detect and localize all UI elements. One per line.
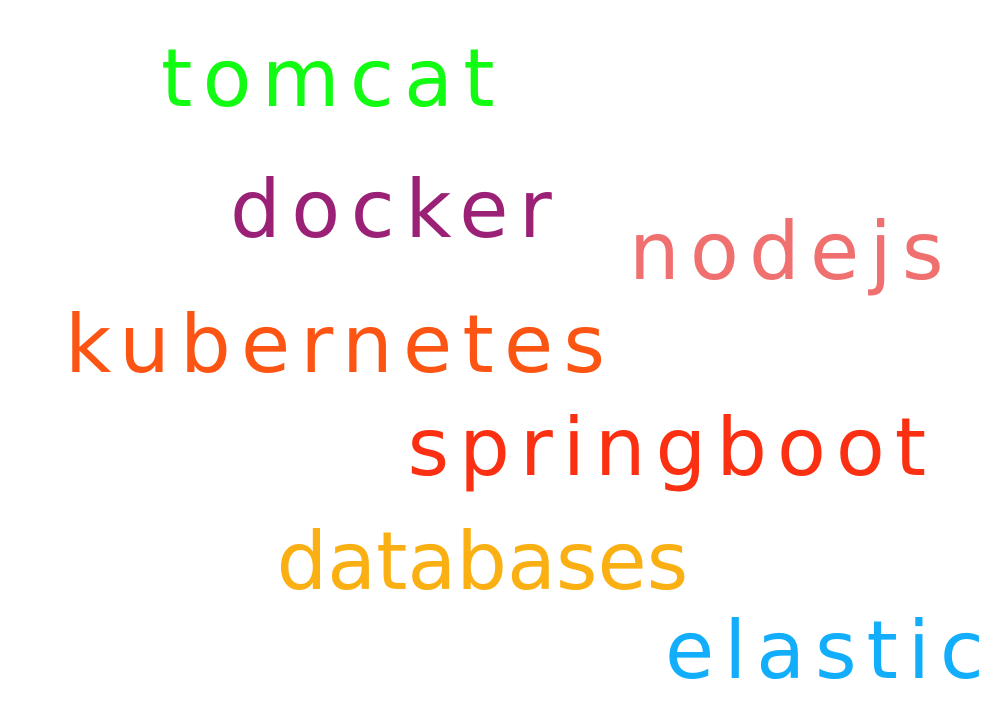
word: docker: docker (230, 163, 562, 256)
word: databases: databases (276, 515, 688, 608)
word: nodejs: nodejs (629, 205, 954, 298)
word: springboot: springboot (408, 401, 936, 494)
word: elastic: elastic (665, 604, 987, 697)
word: tomcat: tomcat (161, 32, 505, 125)
word: kubernetes: kubernetes (65, 298, 615, 391)
